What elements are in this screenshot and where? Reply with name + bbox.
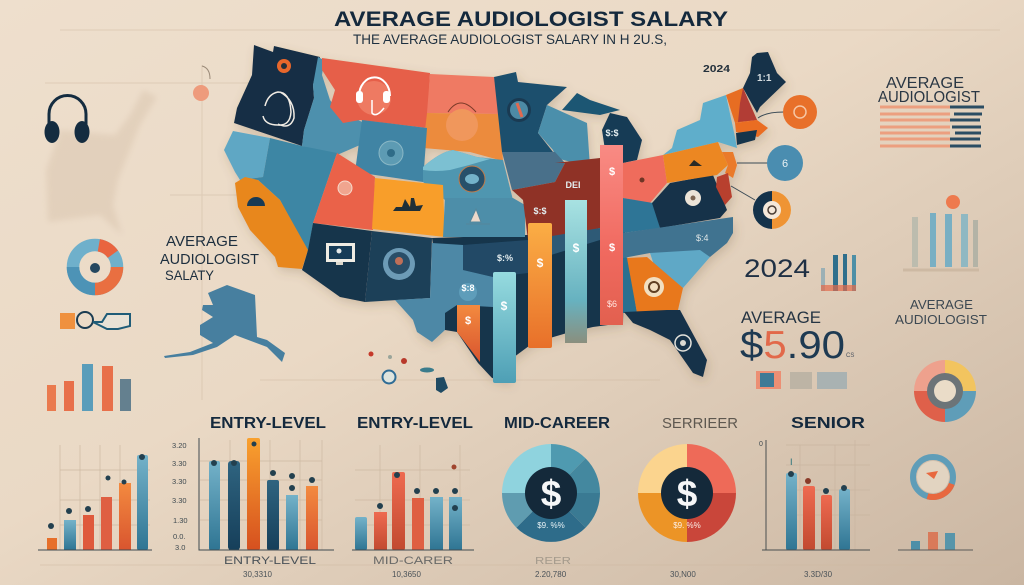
region: nebraska wave [423, 150, 490, 171]
year label top: 2024 [703, 64, 731, 75]
region: missouri [512, 158, 600, 240]
region: southern base [432, 232, 625, 382]
icon: ohio [640, 178, 644, 182]
region: vermont and new hampshire [726, 88, 757, 123]
caption: values: 3.3D/30 [804, 570, 833, 579]
bar labels on map: $:% [497, 253, 513, 263]
icon: wyoming ring [379, 141, 403, 165]
region: delaware [716, 173, 732, 205]
text block: average audiologist right: AVERAGE [886, 75, 964, 92]
map icons [247, 59, 772, 351]
region: south carolina [650, 250, 710, 288]
caption: mid-career: 10,3650 [392, 570, 421, 579]
map: united states [224, 45, 786, 382]
text block: average audiologist lower right: AVERAGE [910, 297, 973, 312]
legend chips [756, 371, 847, 389]
chart: entry-level axis bars: 3.20 [172, 441, 187, 450]
caption: values [670, 570, 833, 579]
caption: entry-level: 30,3310 [243, 570, 272, 579]
icon: hanging pin [193, 66, 210, 101]
icon: montana headphones [356, 77, 391, 115]
chart: entry-level third [352, 445, 474, 550]
region: new jersey [722, 152, 737, 178]
pie: senior: $ [677, 473, 698, 514]
bar labels on map: DEI [565, 180, 581, 190]
icon: new mexico badge [383, 248, 415, 280]
region: florida [624, 310, 707, 377]
region: south dakota [423, 113, 503, 161]
caption: fading career: REER [535, 556, 571, 567]
region: utah [313, 153, 375, 230]
connector: orange badge [758, 95, 817, 129]
region: pennsylvania [663, 142, 728, 183]
text block: average audiologist salary left: SALATY [165, 267, 215, 283]
pie: senior: $9. %% [673, 521, 701, 530]
chart: entry-level axis bars [172, 438, 334, 552]
icon: florida badge [675, 335, 691, 351]
donut: left [70, 242, 120, 292]
year label and mini bars: 2024 [744, 255, 810, 283]
region: new mexico [365, 231, 432, 302]
icon: georgia badge [644, 277, 664, 297]
icon: dakotas circle [446, 103, 478, 141]
region: maine [743, 52, 786, 113]
icon: kansas sail [466, 209, 490, 224]
icon: pennsylvania [689, 160, 702, 166]
icon: texas label [459, 283, 477, 301]
heading: mid-career: MID-CAREER [504, 415, 610, 432]
region: north carolina [623, 217, 733, 258]
region: arkansas band [528, 228, 600, 262]
icon: minnesota badge [507, 98, 531, 122]
heading: serrieer: SERRIEER [662, 415, 738, 432]
icon: arizona monitor [326, 243, 355, 265]
region: nevada [240, 138, 337, 252]
bar: aqua tall: $ [573, 241, 580, 255]
chart: senior: I [790, 457, 793, 467]
bar: salmon: $ [609, 242, 615, 254]
region: nebraska [423, 150, 513, 200]
region: idaho [302, 57, 362, 155]
text block: average audiologist salary left: AUDIOLOGIST [160, 251, 259, 268]
caption: fading career [535, 556, 571, 579]
text block: average audiologist salary left [160, 233, 259, 283]
region: massachusetts [735, 120, 768, 137]
heading: entry-level two: ENTRY-LEVEL [357, 415, 473, 432]
icon: hawaii [368, 352, 448, 393]
donut: right large [914, 360, 976, 422]
caption: entry-level [224, 555, 316, 579]
caption: fading career: 2.20,780 [535, 570, 567, 579]
text block: average audiologist right: AUDIOLOGIST [878, 89, 980, 106]
striped lines [880, 107, 984, 146]
region: colorado [372, 178, 445, 237]
region: montana [322, 58, 430, 128]
caption: entry-level: ENTRY-LEVEL [224, 555, 316, 567]
caption: mid-career [373, 555, 453, 579]
chart: entry-level axis bars: 3.30 [172, 496, 187, 505]
bar: aqua short [493, 272, 516, 383]
bar: amber [528, 223, 552, 348]
bar: orange short: $ [465, 315, 471, 327]
mini chart right [903, 195, 979, 270]
chart: entry-level axis bars: 3.30 [172, 477, 187, 486]
year label and mini bars [744, 254, 856, 291]
chart: senior: 0 [759, 441, 763, 448]
icon: colorado boat [393, 198, 423, 211]
region: georgia [627, 257, 683, 313]
region: ohio [623, 155, 667, 203]
pie: mid-career: $ [541, 473, 562, 514]
bar: salmon: $:$ [605, 128, 619, 138]
chart: entry-level axis bars: 0.0. [173, 532, 186, 541]
heading: entry-level one: ENTRY-LEVEL [210, 415, 326, 432]
icon: nebraska badge [459, 166, 485, 192]
icon: california pin [247, 197, 265, 206]
bar: amber: $ [537, 256, 544, 270]
icon: utah symbol [338, 181, 352, 195]
region: connecticut [736, 130, 757, 145]
bar labels on map [497, 180, 581, 263]
bar: orange short: $:8 [461, 283, 475, 293]
pie: mid-career: $9. %% [537, 521, 565, 530]
region: kansas [443, 198, 525, 237]
icon: virginia badge [685, 190, 701, 206]
pie: mid-career [502, 444, 600, 542]
region: washington and oregon [234, 45, 320, 146]
region: virginia [652, 175, 727, 228]
text block: average salary value: AVERAGE [741, 308, 821, 327]
donut: right small [907, 451, 959, 503]
text block: average audiologist right [878, 75, 980, 106]
bar: aqua short: $ [501, 299, 508, 313]
label: maine: 1:1 [757, 73, 772, 84]
bar labels on map: $:$ [533, 206, 547, 216]
region: lower michigan [602, 113, 642, 163]
text block: average salary value [740, 308, 854, 367]
region: tennessee side [620, 255, 637, 313]
chart: entry-level axis bars: 3.30 [172, 459, 187, 468]
region: oklahoma [463, 240, 528, 277]
icon: washington seal [277, 59, 291, 73]
region: arizona [302, 223, 372, 302]
region: california [235, 177, 308, 269]
region: north dakota [427, 74, 499, 114]
region: pacific light blue [224, 131, 270, 180]
connector: donut badge [731, 186, 791, 229]
bar: salmon [600, 128, 623, 325]
heading: senior: SENIOR [791, 415, 865, 432]
subtitle: THE AVERAGE AUDIOLOGIST SALARY IN H 2U.S, [353, 32, 667, 47]
label: carolina: $:4 [696, 233, 709, 243]
icon: hearing device [60, 312, 130, 329]
icon: oregon stethoscope [263, 92, 294, 126]
chart: small bars lower right [898, 532, 973, 550]
chart: top left bars [47, 364, 131, 411]
chart: entry-level axis bars: 3.0 [175, 543, 185, 552]
icon: alaska [164, 285, 285, 362]
caption: mid-career: MID-CARER [373, 555, 453, 567]
chart: entry-level axis bars: 1.30 [173, 516, 188, 525]
text block: average salary value: CS [846, 353, 854, 359]
text block: average audiologist lower right: AUDIOLOGIST [895, 312, 987, 327]
connector: blue badge: 6 [782, 158, 788, 170]
bar: salmon: $6 [607, 299, 617, 309]
pie: senior [638, 444, 736, 542]
text block: average salary value: $5.90 [740, 324, 845, 367]
region: wyoming [355, 120, 427, 182]
bar: aqua tall [565, 200, 587, 343]
region: wisconsin [538, 105, 590, 167]
region: kentucky [623, 198, 660, 233]
text block: average audiologist salary left: AVERAGE [166, 233, 238, 250]
region: new york [663, 95, 737, 155]
region: minnesota [494, 72, 567, 152]
region: iowa [502, 152, 565, 190]
region: texas [395, 243, 493, 342]
connector: blue badge [737, 145, 803, 181]
chart: senior [759, 440, 870, 550]
region: upper michigan [562, 93, 620, 115]
bar: salmon: $ [609, 166, 615, 178]
caption: values: 30,N00 [670, 570, 696, 579]
text block: average audiologist lower right [895, 297, 987, 327]
icon: headphones [44, 96, 90, 143]
title: AVERAGE AUDIOLOGIST SALARY [334, 8, 728, 31]
chart: entry-level growth [38, 445, 152, 550]
bar: orange short [457, 283, 480, 362]
ghost map [46, 90, 157, 235]
